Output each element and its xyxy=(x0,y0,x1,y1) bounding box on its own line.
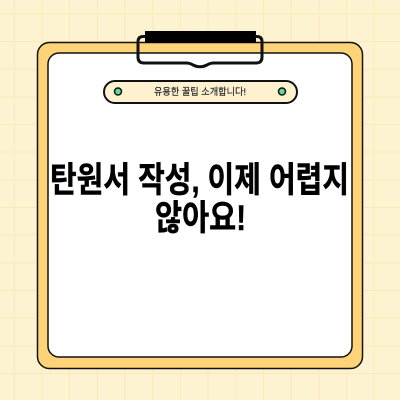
banner text: 유용한 꿀팁 소개합니다! xyxy=(154,86,246,98)
tip banner xyxy=(104,81,297,103)
title xyxy=(50,161,349,238)
icon: right green dot xyxy=(278,88,286,95)
icon: left green dot xyxy=(114,88,122,95)
icon: clipboard clip xyxy=(138,31,262,67)
clipboard board xyxy=(38,42,362,368)
title: 않아요! xyxy=(155,199,246,238)
clipboard paper xyxy=(48,53,352,357)
